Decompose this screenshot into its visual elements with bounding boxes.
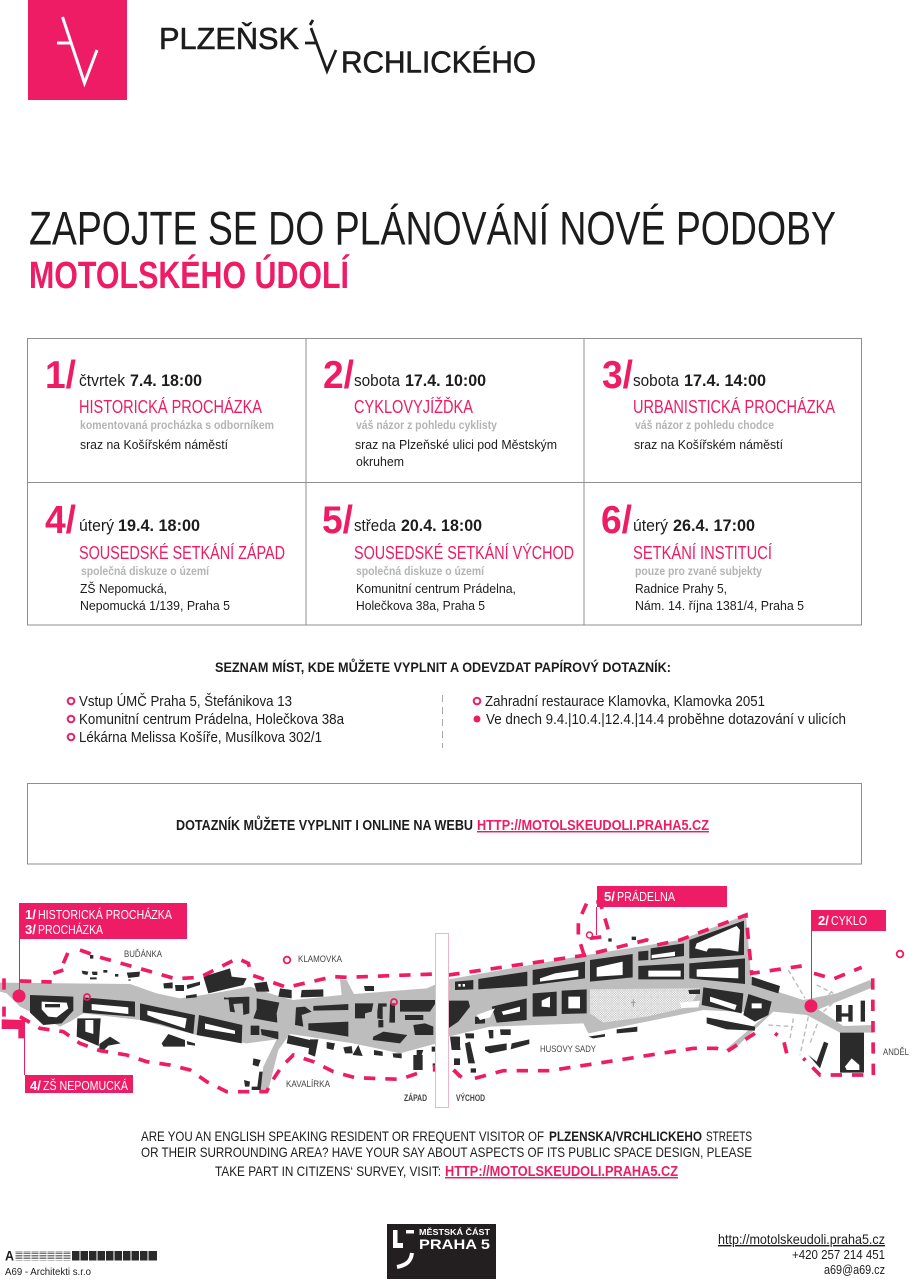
event 1: komentovaná procházka s odborníkem [80,418,274,432]
map label: stops 1 and 3: 1/ [25,907,36,922]
english invitation: ARE YOU AN ENGLISH SPEAKING RESIDENT OR FREQUENT VISITOR OF [141,1128,544,1144]
title: MOTOLSKÉHO ÚDOLÍ [29,253,350,297]
event 4: ZŠ Nepomucká, [80,581,167,596]
west road network [0,978,448,1090]
map label: stop 2: 2/ [818,913,829,928]
footer: A69 logo: A [5,1248,14,1264]
events table grid [28,338,862,625]
map label: stop 5 [586,886,727,938]
map west part [0,950,460,1092]
event 2 [323,354,557,469]
map label: stop 5: 5/ [604,889,615,904]
places list right [474,694,846,728]
event 5: 20.4. 18:00 [401,516,482,535]
event 4 [45,499,285,613]
map label: stops 1 and 3: 3/ [25,922,36,937]
map place names: KAVALÍRKA [286,1079,331,1090]
footer: A69 logo: A69 - Architekti s.r.o [5,1266,91,1278]
map place names: ANDĚL [883,1047,909,1058]
event 6: 6/ [601,499,632,542]
event 6: Radnice Prahy 5, [635,581,727,596]
online survey box [28,784,862,864]
map label: stops 1 and 3: HISTORICKÁ PROCHÁZKA [38,907,172,922]
event 1 [45,354,274,452]
event 5: společná diskuze o území [356,564,485,578]
event 2: CYKLOVYJÍŽĎKA [354,396,474,417]
map place markers [84,951,903,1005]
event 3: sraz na Košířském náměstí [634,437,783,452]
map place names: HUSOVY SADY [540,1044,597,1055]
header wordmark: PLZEŇSK [159,21,299,56]
footer: contacts: +420 257 214 451 [792,1247,885,1262]
west route dashed boundary [2,950,460,1092]
east cemetery hatched area [590,988,700,1023]
event 6: Nám. 14. října 1381/4, Praha 5 [635,598,804,613]
event 2: 2/ [323,354,354,397]
event 5 [322,499,574,613]
places list left: Lékárna Melissa Košíře, Musílkova 302/1 [79,730,322,746]
east buildings [448,921,865,1073]
event 1: HISTORICKÁ PROCHÁZKA [79,396,263,417]
event 2: váš názor z pohledu cyklisty [356,418,497,432]
event 5: Holečkova 38a, Praha 5 [356,598,485,613]
event 1: 7.4. 18:00 [130,371,202,390]
header wordmark [159,20,536,80]
title [29,202,836,297]
map label: stop 4: 4/ [30,1078,41,1093]
event 6: úterý [633,516,668,535]
east road network [448,915,873,1050]
english invitation: HTTP://MOTOLSKEUDOLI.PRAHA5.CZ [445,1164,678,1180]
footer: contacts [718,1231,885,1277]
map label: stops 1 and 3: PROCHÁZKA [38,922,103,937]
header logo: pink square [28,0,127,100]
english invitation: PLZENSKA/VRCHLICKEHO [549,1128,702,1144]
west buildings [30,955,460,1090]
footer: Praha 5 logo: MĚSTSKÁ ČÁST [419,1226,491,1237]
map place names: KLAMOVKA [298,954,343,965]
event 1: čtvrtek [79,371,125,390]
event 2: sobota [354,371,400,390]
map label: stops 1 and 3 [12,903,187,1002]
footer: Praha 5 logo: PRAHA 5 [419,1236,490,1252]
event 4: SOUSEDSKÉ SETKÁNÍ ZÁPAD [79,542,285,563]
event 5: 5/ [322,499,353,542]
places heading: SEZNAM MÍST, KDE MŮŽETE VYPLNIT A ODEVZDAT PAPÍROVÝ DOTAZNÍK: [215,657,671,675]
event 3: sobota [633,371,679,390]
english invitation: STREETS [706,1128,752,1144]
event 2: 17.4. 10:00 [405,371,486,390]
event 1: 1/ [45,354,76,397]
central west/east divider strip [436,934,448,1108]
event 4: 19.4. 18:00 [118,516,200,535]
event 3 [602,354,836,452]
map label: stop 2 [804,910,886,1012]
places list left: Komunitní centrum Prádelna, Holečkova 38a [79,712,345,728]
event 4: 4/ [45,499,76,542]
map place names [124,949,909,1104]
event 6: SETKÁNÍ INSTITUCÍ [633,542,773,563]
header wordmark: RCHLICKÉHO [341,44,536,80]
footer: A69 logo [5,1248,157,1278]
event 6 [601,499,804,613]
online survey box: HTTP://MOTOLSKEUDOLI.PRAHA5.CZ [477,818,709,834]
east pedestrian dashed crossings [768,970,840,1055]
map label: stop 5: PRÁDELNA [617,889,675,904]
event 2: okruhem [356,454,404,469]
event 5: Komunitní centrum Prádelna, [356,581,516,596]
event 6: 26.4. 17:00 [673,516,755,535]
english invitation: TAKE PART IN CITIZENS‘ SURVEY, VISIT: [215,1163,441,1179]
event 2: sraz na Plzeňské ulici pod Městským [355,437,557,452]
footer: Praha 5 logo [387,1224,496,1279]
map east part [448,902,873,1078]
event 5: středa [354,516,396,535]
places list right: Ve dnech 9.4.|10.4.|12.4.|14.4 proběhne dotazování v ulicích [486,712,846,728]
event 3: váš názor z pohledu chodce [635,418,774,432]
event 1: sraz na Košířském náměstí [80,437,228,452]
english invitation [141,1128,752,1180]
places list left: Vstup ÚMČ Praha 5, Štefánikova 13 [79,693,292,710]
map label: stop 4: ZŠ NEPOMUCKÁ [43,1078,128,1093]
footer: contacts: a69@a69.cz [824,1262,885,1277]
event 4: Nepomucká 1/139, Praha 5 [80,598,230,613]
map place names: VÝCHOD [456,1092,485,1104]
online survey box: DOTAZNÍK MŮŽETE VYPLNIT I ONLINE NA WEBU [176,815,473,834]
footer: contacts: http://motolskeudoli.praha5.cz [718,1231,885,1247]
map label: stop 4 [24,1035,133,1093]
east route dashed boundary [448,902,873,1078]
event 6: pouze pro zvané subjekty [635,564,762,578]
event 5: SOUSEDSKÉ SETKÁNÍ VÝCHOD [354,542,574,563]
event 3: URBANISTICKÁ PROCHÁZKA [633,396,836,417]
event 4: úterý [79,516,114,535]
event 3: 17.4. 14:00 [684,371,766,390]
english invitation: OR THEIR SURROUNDING AREA? HAVE YOUR SAY ABOUT ASPECTS OF ITS PUBLIC SPACE DESIGN, PLEASE [141,1144,752,1160]
map place names: BUĎÁNKA [124,949,163,960]
places list left [68,693,345,746]
map place names: ZÁPAD [404,1093,427,1104]
event 3: 3/ [602,354,633,397]
places list right: Zahradní restaurace Klamovka, Klamovka 2051 [485,694,765,710]
map label: stop 2: CYKLO [831,913,867,928]
event 4: společná diskuze o území [81,564,210,578]
